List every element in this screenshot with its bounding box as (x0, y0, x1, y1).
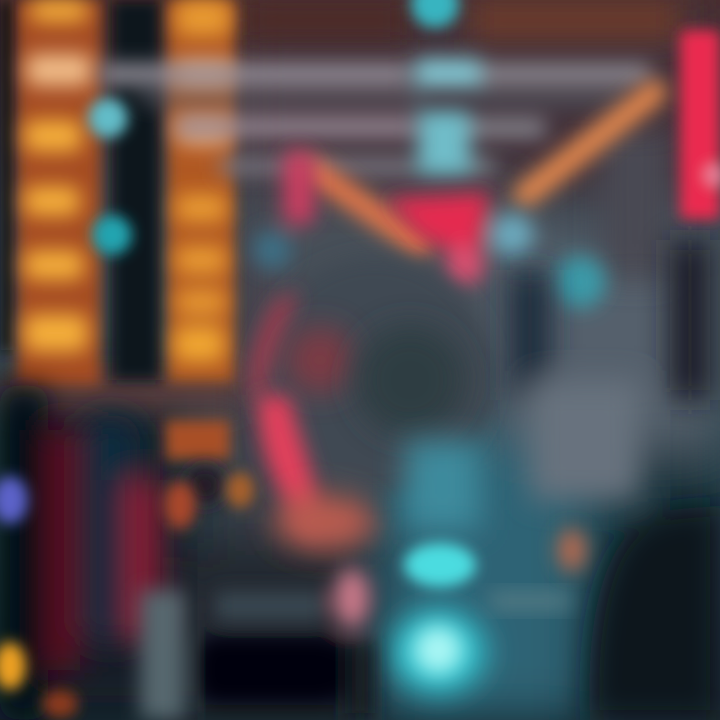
teal floor lights (390, 440, 570, 694)
bottom-left crowd silhouettes (0, 385, 160, 720)
top maroon band (0, 0, 680, 410)
large central sphere (248, 257, 493, 552)
pink and red center accent (252, 150, 606, 308)
orange V-shaped neon line (315, 92, 655, 245)
yellow sign lights: left column (24, 0, 92, 352)
bottom-center shapes (140, 465, 586, 720)
right dark figures (510, 240, 720, 720)
teal side lights (88, 0, 459, 255)
small edge lights (0, 472, 254, 718)
blurred headline text bands (100, 58, 650, 176)
left dark columns (0, 0, 160, 380)
orange neon columns (18, 0, 234, 460)
yellow sign lights: right column (174, 0, 232, 362)
red sign at right edge (680, 30, 720, 220)
